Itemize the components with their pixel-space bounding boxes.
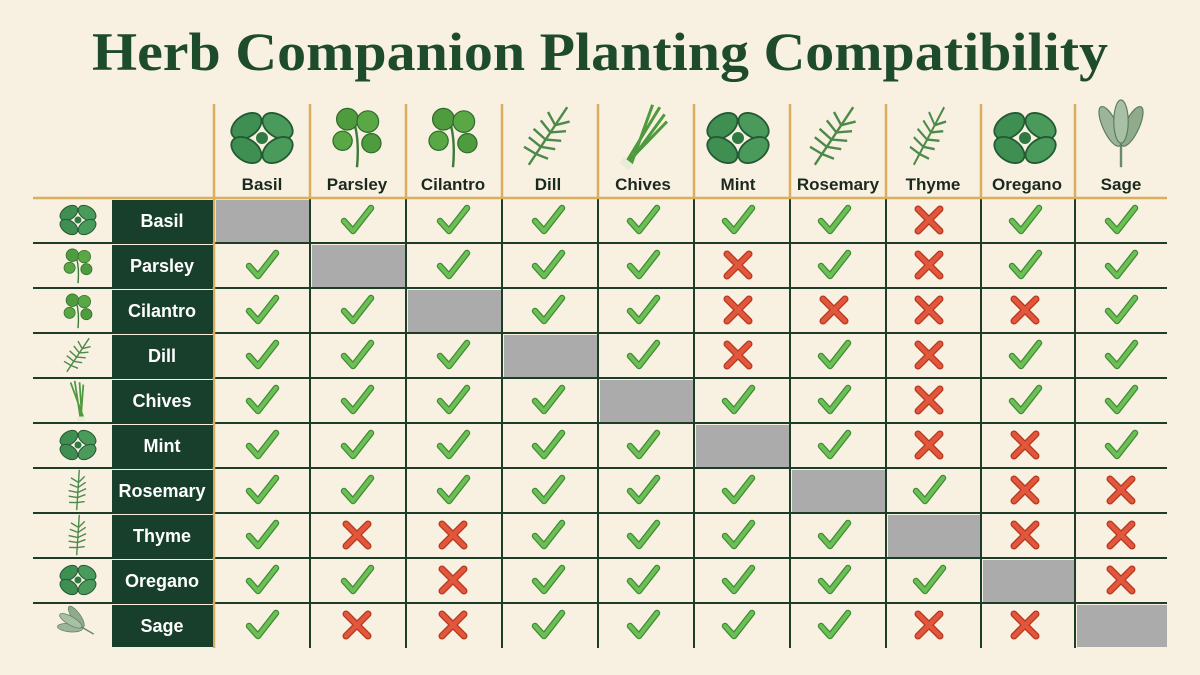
Chives bbox=[249, 388, 276, 411]
row labels bbox=[112, 200, 213, 647]
Dill bbox=[249, 343, 276, 366]
row labels: Basil bbox=[140, 211, 184, 231]
row labels: Dill bbox=[148, 346, 176, 366]
column headers: Mint bbox=[721, 175, 756, 194]
row labels: Oregano bbox=[125, 571, 199, 591]
column headers: Dill bbox=[535, 175, 561, 194]
Rosemary bbox=[249, 478, 276, 501]
column headers: Basil bbox=[242, 175, 282, 194]
title: Herb Companion Planting Compatibility bbox=[92, 22, 1108, 82]
Cilantro bbox=[249, 298, 276, 321]
row icons bbox=[52, 202, 101, 647]
Mint bbox=[249, 433, 276, 456]
row labels: Cilantro bbox=[128, 301, 196, 321]
Oregano bbox=[249, 568, 276, 591]
row labels: Rosemary bbox=[118, 481, 206, 501]
Parsley bbox=[249, 253, 276, 276]
column headers bbox=[226, 100, 1147, 194]
column headers: Parsley bbox=[327, 175, 388, 194]
column headers: Thyme bbox=[906, 175, 960, 194]
Thyme bbox=[249, 523, 276, 546]
column headers: Oregano bbox=[992, 175, 1062, 194]
diagonal gray cells bbox=[216, 200, 1167, 647]
column headers: Sage bbox=[1101, 175, 1141, 194]
row labels: Mint bbox=[144, 436, 180, 456]
grid lines bbox=[33, 198, 1167, 648]
compatibility marks bbox=[249, 208, 1135, 636]
Basil bbox=[344, 208, 371, 231]
column headers: Chives bbox=[615, 175, 671, 194]
row labels: Chives bbox=[132, 391, 192, 411]
Sage bbox=[249, 613, 276, 636]
column headers: Rosemary bbox=[797, 175, 880, 194]
row labels: Thyme bbox=[133, 526, 191, 546]
column headers: Cilantro bbox=[421, 175, 485, 194]
row labels: Parsley bbox=[130, 256, 194, 276]
row labels: Sage bbox=[140, 616, 184, 636]
